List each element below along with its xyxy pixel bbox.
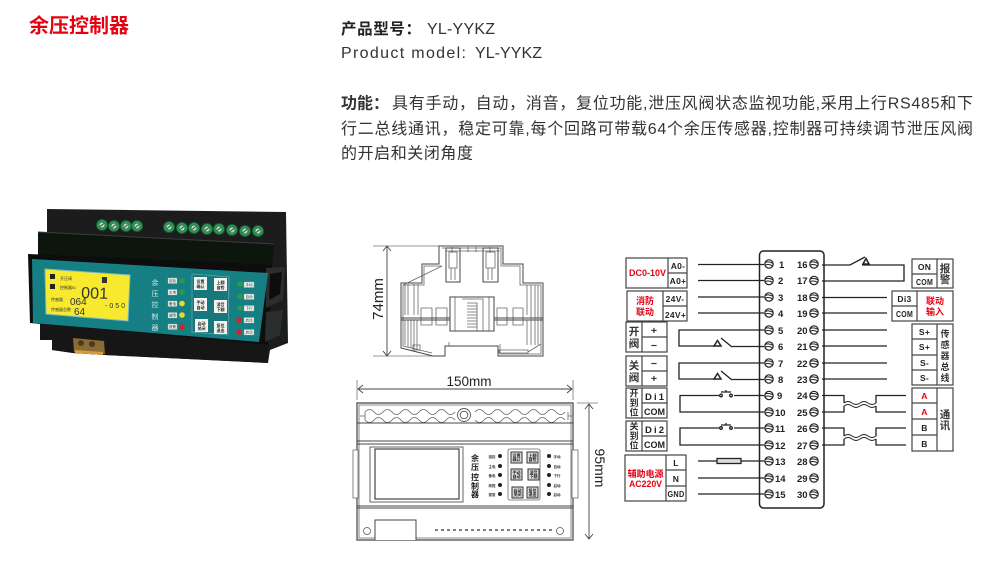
photo: left indicators: 故障 — [169, 312, 176, 318]
front view vertical label: 压 — [471, 463, 479, 472]
front view drawing with dimensions — [353, 374, 608, 540]
side view inner ribs — [405, 283, 541, 353]
box: 报警 — [912, 259, 953, 288]
left labels and dots: 报警 — [488, 492, 496, 497]
dimension: 150mm — [357, 374, 573, 400]
keypad outline: 上翻 — [528, 452, 536, 458]
photo: right indicators: 启动 — [246, 318, 253, 322]
photo: button keypad: 下翻 — [216, 306, 224, 312]
box: 消防联动: 联动 — [636, 306, 654, 317]
left wires: analog and fire link — [698, 264, 764, 313]
product photo: controller — [28, 209, 288, 363]
photo: LCD screen: 传感器总数 — [51, 306, 71, 312]
box: 传感器总线: 线 — [940, 372, 950, 383]
keypad outline — [508, 449, 540, 500]
terminal block: 1 — [779, 260, 785, 271]
right labels and dots: 启动 — [554, 483, 561, 488]
lower terminal strip — [364, 520, 564, 540]
terminal block: 11 — [775, 424, 786, 435]
function description text block — [341, 94, 973, 162]
left labels and dots: 备电 — [488, 473, 496, 478]
box: 关阀: − — [651, 358, 657, 370]
photo: right indicators: 下行 — [246, 306, 253, 310]
side view drawing with 74mm dimension — [370, 246, 543, 356]
box: 通讯 — [912, 388, 953, 451]
box: 报警: 报 — [940, 262, 951, 275]
product model text block: 产品型号： — [341, 20, 421, 38]
wiring diagram — [625, 251, 953, 508]
terminal block: 28 — [797, 457, 808, 468]
dimension: 95mm — [577, 403, 608, 539]
photo: button keypad: 自动 — [196, 304, 204, 310]
dimension: 74mm — [370, 246, 500, 356]
box: 辅助电源 AC220V: 辅助电源 — [627, 468, 664, 479]
box: 关到位: COM — [644, 440, 665, 451]
product model text block — [341, 20, 542, 62]
close valve relay wiring — [679, 363, 764, 380]
photo: left indicators: 备电 — [169, 301, 176, 306]
photo: button keypad — [192, 274, 229, 335]
side view outline — [401, 246, 543, 356]
power wiring with fuse — [698, 458, 764, 494]
box: 消防联动 — [627, 291, 687, 321]
side view centre block — [450, 297, 494, 331]
open position switch wiring — [680, 390, 764, 412]
function description text block: 具有手动，自动，消音，复位功能,泄压风阀状态监视功能,采用上行RS485和下 — [392, 94, 973, 112]
product model text block: Product model: — [341, 45, 466, 62]
terminal block: 9 — [777, 391, 782, 402]
box: 关到位: 关 — [629, 420, 639, 432]
photo: rear tier of housing — [40, 209, 288, 363]
dimension: 95mm: 95mm — [592, 449, 608, 487]
box: 通讯: A — [921, 391, 928, 401]
box: DC0-10V: DC0-10V — [629, 268, 666, 278]
right labels and dots: 手动 — [554, 454, 561, 459]
terminal block: 16 — [797, 260, 808, 271]
box: 传感器总线: 传 — [940, 328, 950, 339]
terminal block: 25 — [797, 408, 808, 419]
terminal block: 23 — [797, 375, 808, 386]
box: 传感器总线: S- — [920, 358, 929, 368]
function description text block: 行二总线通讯，稳定可靠,每个回路可带载64个余压传感器,控制器可持续调节泄压风阀 — [341, 119, 973, 138]
right wires: link input and sensor bus — [822, 298, 887, 379]
right labels and dots — [547, 454, 561, 497]
title: 余压控制器 — [29, 14, 129, 38]
terminal block: 13 — [775, 457, 786, 468]
box: 消防联动: 24V- — [666, 294, 684, 304]
left labels and dots: 主电 — [488, 464, 496, 469]
box: 联动输入: Di3 — [897, 294, 912, 304]
box: 开到位: 到 — [629, 398, 639, 408]
terminal block: 8 — [778, 375, 783, 386]
photo: button keypad: 上翻 — [216, 279, 224, 285]
photo: button keypad: 复位 — [216, 322, 224, 328]
photo: button keypad: 确认 — [196, 283, 204, 289]
box: 开到位: 开 — [629, 388, 639, 398]
photo: button keypad: 启动 — [198, 320, 206, 326]
box: 联动输入: 输入 — [926, 306, 944, 317]
box: 关到位 — [626, 420, 667, 451]
front view vertical label: 控 — [471, 472, 479, 482]
terminal block: 12 — [775, 441, 786, 452]
box: 开到位: Di1 — [645, 392, 665, 403]
keypad outline: 下翻 — [530, 473, 538, 479]
box: 联动输入: COM — [896, 309, 913, 319]
box: 关阀: 关 — [629, 359, 640, 372]
box: 开到位: 位 — [629, 406, 639, 418]
box: 辅助电源 AC220V: GND — [668, 489, 684, 499]
terminal block — [760, 251, 824, 508]
terminal block: 17 — [797, 276, 808, 287]
terminal block: 29 — [797, 474, 808, 485]
right labels and dots: 下行 — [554, 473, 561, 478]
box: 关阀: 阀 — [629, 371, 639, 384]
photo: panel vertical label: 压 — [152, 290, 158, 298]
box: 通讯: B — [921, 423, 928, 433]
box: DC0-10V: A0- — [671, 261, 685, 271]
terminal block: 3 — [778, 293, 783, 304]
terminal block: 4 — [778, 309, 784, 320]
keypad outline: 关闭 — [514, 491, 522, 497]
box: 传感器总线 — [912, 324, 953, 385]
alarm relay wiring — [822, 257, 904, 281]
keypad outline: 复位 — [528, 487, 536, 493]
photo: panel vertical label — [152, 278, 158, 332]
photo: panel vertical label: 余 — [152, 278, 158, 287]
photo: LCD screen: 001 — [81, 285, 108, 303]
photo: button keypad: 手动 — [196, 299, 204, 305]
box: 辅助电源 AC220V: AC220V — [629, 479, 662, 489]
photo: panel vertical label: 器 — [152, 324, 158, 332]
photo: button keypad: 设置 — [196, 278, 204, 284]
dimension: 74mm: 74mm — [370, 278, 387, 320]
photo: lower housing — [33, 323, 268, 363]
photo: LCD screen: 控制器ID — [60, 284, 76, 290]
function description text block: 功能： — [341, 94, 389, 112]
photo: panel vertical label: 控 — [152, 300, 158, 309]
product model text block: YL-YYKZ — [427, 21, 495, 38]
box: 关到位: 位 — [629, 440, 639, 450]
front view vertical label — [471, 453, 479, 499]
photo: LCD screen — [45, 269, 130, 321]
box: 消防联动: 消防 — [636, 295, 654, 306]
terminal block: 7 — [778, 359, 783, 370]
box: 开阀: 阀 — [629, 337, 639, 350]
photo: LCD screen: 064 — [70, 297, 87, 308]
keypad outline: 退出 — [528, 491, 536, 497]
left labels and dots: 巡检 — [488, 454, 496, 459]
box: 辅助电源 AC220V: N — [673, 474, 679, 484]
box: 开到位 — [626, 388, 667, 418]
photo: left indicators: 巡检 — [169, 278, 176, 283]
box: 辅助电源 AC220V — [625, 455, 686, 501]
keypad outline: 设置 — [512, 452, 520, 458]
photo: right indicators — [236, 281, 254, 335]
photo: middle tier of housing — [38, 232, 274, 268]
box: 通讯: 讯 — [940, 419, 951, 432]
photo: right indicators: 手动 — [246, 282, 253, 287]
terminal block: 14 — [775, 474, 786, 485]
box: 开阀: 开 — [629, 326, 640, 338]
box: 传感器总线: S+ — [919, 342, 930, 352]
box: 报警: ON — [918, 262, 931, 272]
terminal block: 21 — [797, 342, 808, 353]
side view clips — [446, 248, 498, 282]
keypad outline: 启动 — [514, 487, 522, 493]
keypad outline: 自检 — [528, 456, 536, 462]
keypad outline: 消音 — [530, 469, 538, 475]
top terminal strip — [360, 408, 572, 422]
box: 消防联动: 24V+ — [665, 310, 686, 320]
keypad outline: 手动 — [512, 469, 520, 475]
terminal block: 27 — [797, 441, 808, 452]
right labels and dots: 启动 — [554, 492, 561, 497]
terminal block: 15 — [775, 490, 786, 501]
close position switch wiring — [680, 423, 764, 445]
left labels and dots — [488, 454, 502, 497]
box: 开阀: − — [651, 340, 657, 352]
function description text block: 的开启和关闭角度 — [341, 144, 473, 162]
terminal block: 10 — [775, 408, 786, 419]
box: 通讯: A — [921, 407, 928, 417]
box: DC0-10V — [626, 258, 687, 288]
side tabs — [353, 450, 578, 498]
photo: front frame — [28, 254, 272, 345]
terminal block: 24 — [797, 391, 808, 402]
box: 传感器总线: S- — [920, 373, 929, 383]
box: DC0-10V: A0+ — [670, 276, 686, 286]
terminal block: 30 — [797, 490, 808, 501]
dimension: 150mm: 150mm — [446, 374, 492, 389]
terminal block: 19 — [797, 309, 808, 320]
box: 通讯: 通 — [940, 409, 951, 421]
box: 联动输入 — [892, 291, 953, 321]
photo: button keypad: 退出 — [216, 327, 224, 333]
box: 关到位: Di2 — [645, 425, 664, 436]
terminal block: 5 — [778, 326, 784, 337]
box: 关阀: + — [651, 373, 657, 385]
photo: LCD screen: -050 — [105, 303, 125, 310]
terminal block: 26 — [797, 424, 808, 435]
box: 关到位: 到 — [629, 431, 639, 441]
terminal block: 2 — [778, 276, 783, 287]
keypad outline: 自动 — [512, 473, 520, 479]
box: 传感器总线: S+ — [919, 327, 930, 337]
communication wiring — [822, 396, 906, 445]
right labels and dots: 自动 — [554, 464, 561, 469]
box: 开阀: + — [651, 325, 657, 337]
photo: LCD screen: 开压阀 — [60, 275, 72, 281]
photo: panel vertical label: 制 — [152, 312, 158, 321]
left labels and dots: 故障 — [488, 483, 496, 488]
box: 关阀 — [626, 356, 667, 386]
front view vertical label: 余 — [471, 453, 479, 463]
box: 开阀 — [626, 322, 667, 352]
photo: left indicators — [168, 278, 185, 330]
product model text block: YL-YYKZ — [475, 45, 542, 62]
photo: right indicators: 启动 — [246, 330, 253, 334]
keypad outline: 确认 — [512, 456, 520, 462]
box: 报警: COM — [916, 277, 933, 287]
front view vertical label: 制 — [471, 481, 479, 491]
box: 开到位: COM — [644, 407, 665, 418]
photo: left indicators: 主电 — [169, 290, 176, 294]
terminal block: 22 — [797, 359, 808, 370]
front view outline — [357, 403, 573, 540]
box: 辅助电源 AC220V: L — [673, 458, 679, 468]
open valve relay wiring — [679, 330, 764, 347]
front view vertical label: 器 — [471, 490, 479, 499]
box: 通讯: B — [921, 439, 928, 449]
photo: brass connector — [73, 338, 105, 355]
terminal block: 18 — [797, 293, 808, 304]
photo: LCD screen: 传感器 — [51, 296, 63, 302]
photo: left indicators: 报警 — [169, 324, 176, 329]
box: 报警: 警 — [940, 273, 951, 286]
photo: LCD screen: 64 — [74, 307, 86, 318]
screen outline — [370, 447, 463, 502]
box: 联动输入: 联动 — [926, 295, 944, 306]
box: 传感器总线: 感 — [940, 339, 950, 350]
box: 传感器总线: 器 — [940, 351, 950, 361]
photo: right indicators: 自动 — [246, 294, 253, 299]
photo: teal front panel — [32, 259, 268, 342]
terminal block: 6 — [778, 342, 783, 353]
photo: button keypad: 关闭 — [198, 325, 206, 331]
box: 传感器总线: 总 — [940, 361, 950, 372]
side view small blocks — [421, 308, 523, 325]
photo: button keypad: 消音 — [216, 301, 224, 307]
photo: right side clips — [265, 267, 285, 342]
photo: button keypad: 自检 — [216, 284, 224, 290]
photo: terminal screws — [96, 220, 264, 236]
terminal block: 20 — [797, 326, 808, 337]
